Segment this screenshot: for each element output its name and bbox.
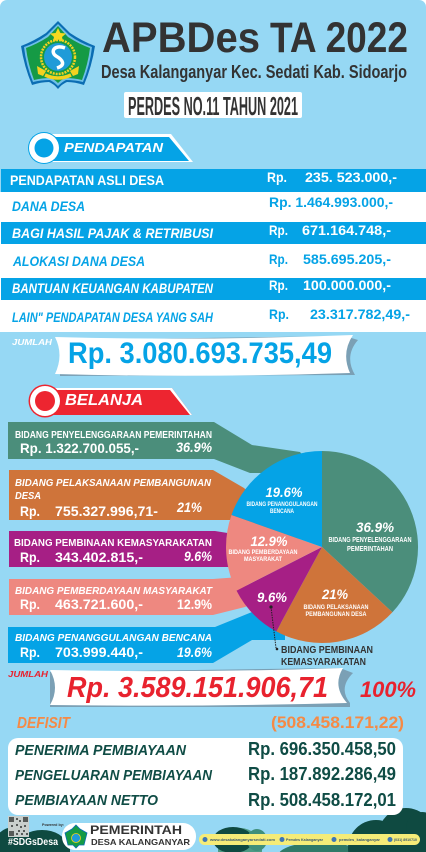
row: pengeluaran pembiayaan: Rp. 187.892.286,49 xyxy=(248,764,396,784)
footer hills xyxy=(0,808,426,852)
row: dana desa xyxy=(12,194,393,214)
row: pendapatan asli desa xyxy=(10,169,397,188)
footer logo pill: DESA KALANGANYAR xyxy=(91,837,190,847)
logo: Sidoarjo emblem xyxy=(21,21,95,89)
bar: pelaksanaan pembangunan: 755.327.996,71- xyxy=(55,503,158,519)
row: lain-lain: 23.317.782,49,- xyxy=(310,306,410,322)
bar: pelaksanaan pembangunan xyxy=(9,470,300,540)
callout: bidang pembinaan xyxy=(269,605,373,668)
pie chart xyxy=(226,451,418,643)
income total: Rp. 3.080.693.735,49 xyxy=(68,337,332,370)
bar: pelaksanaan pembangunan: Rp. xyxy=(20,503,40,519)
row: bantuan keuangan: 100.000.000,- xyxy=(303,277,391,293)
bar: pelaksanaan pembangunan: 21% xyxy=(176,499,202,515)
row: dana desa: DANA DESA xyxy=(12,198,85,214)
bar: pemberdayaan masyarakat: 12.9% xyxy=(177,596,212,612)
bar: pembinaan kemasyarakatan: BIDANG PEMBINAAN KEMASYARAKATAN xyxy=(14,538,212,549)
expense total xyxy=(8,668,416,707)
bar: penanggulangan bencana: 703.999.440,- xyxy=(55,644,143,660)
bar: pembinaan kemasyarakatan: 9.6% xyxy=(184,548,212,564)
footer logo pill xyxy=(62,823,196,850)
income total xyxy=(12,335,358,376)
bar: penanggulangan bencana xyxy=(8,612,285,663)
deficit row: DEFISIT xyxy=(17,715,71,732)
bar: pelaksanaan pembangunan: DESA xyxy=(15,490,41,502)
contact strip: Pemdes Kalanganyar xyxy=(286,837,323,842)
bar: pemberdayaan masyarakat: Rp. xyxy=(20,596,40,612)
heading: pendapatan xyxy=(28,132,193,164)
footer logo pill: PEMERINTAH xyxy=(90,825,182,837)
row: pengeluaran pembiayaan xyxy=(15,764,396,784)
bar: pembinaan kemasyarakatan xyxy=(9,531,240,567)
row: alokasi dana desa: Rp. xyxy=(269,251,288,267)
pie label: 36.9%: PEMERINTAHAN xyxy=(347,546,393,553)
row: penerima pembiayaan: Rp. 696.350.458,50 xyxy=(248,739,396,759)
pie label: 36.9% xyxy=(328,519,412,553)
pie label: 19.6%: BENCANA xyxy=(270,509,295,515)
row: penerima pembiayaan xyxy=(15,739,396,759)
row: lain-lain: Rp. xyxy=(269,306,289,322)
row: pendapatan asli desa: Rp. xyxy=(267,169,287,185)
deficit row: (508.458.171,22) xyxy=(271,713,404,732)
pie label: 12.9%: MASYARAKAT xyxy=(244,557,282,563)
pie label: 19.6% xyxy=(246,484,318,515)
title: TA 2022 xyxy=(270,14,408,62)
expense total: 100% xyxy=(360,677,416,702)
row: bagi hasil pajak: BAGI HASIL PAJAK & RETRIBUSI xyxy=(12,225,214,241)
expense total: Rp. 3.589.151.906,71 xyxy=(67,672,328,704)
pie label: 21%: 21% xyxy=(321,586,349,602)
heading: belanja: BELANJA xyxy=(65,392,143,409)
row: bagi hasil pajak: 671.164.748,- xyxy=(302,222,391,238)
row: bagi hasil pajak xyxy=(12,222,391,241)
pie label: 12.9%: 12.9% xyxy=(250,533,288,549)
contact strip: www.desakalanganyarsedati.com xyxy=(209,837,275,842)
pie label: 19.6%: 19.6% xyxy=(266,484,303,500)
expense total: JUMLAH xyxy=(8,670,48,679)
pie label: 12.9% xyxy=(228,533,298,563)
bar: penyelenggaraan pemerintahan: BIDANG PENYELENGGARAAN PEMERINTAHAN xyxy=(15,430,212,441)
heading: pendapatan: PENDAPATAN xyxy=(64,140,164,155)
bar: pembinaan kemasyarakatan: Rp. xyxy=(20,549,40,565)
row: bantuan keuangan xyxy=(12,277,391,296)
row: alokasi dana desa: ALOKASI DANA DESA xyxy=(12,253,145,269)
panel: financing xyxy=(8,738,403,815)
pie label: 21%: BIDANG PELAKSANAAN xyxy=(304,605,368,611)
row: dana desa: Rp. 1.464.993.000,- xyxy=(269,194,393,210)
bar: penyelenggaraan pemerintahan xyxy=(8,422,340,500)
panel: income table xyxy=(0,169,426,332)
contact strip: (031) 8910710 xyxy=(394,837,418,842)
title: APBDes xyxy=(102,14,260,62)
hashtag: #SDGsDesa xyxy=(8,837,58,848)
row: alokasi dana desa: 585.695.205,- xyxy=(303,251,391,267)
title xyxy=(102,14,408,62)
bar: pelaksanaan pembangunan: BIDANG PELAKSANAAN PEMBANGUNAN xyxy=(15,477,211,489)
contact strip: pemdes_kalanganyar xyxy=(339,837,380,842)
bar: pemberdayaan masyarakat: BIDANG PEMBERDAYAAN MASYARAKAT xyxy=(15,586,213,597)
bar: penanggulangan bencana: Rp. xyxy=(20,644,40,660)
row: lain-lain: LAIN" PENDAPATAN DESA YANG SAH xyxy=(12,309,214,325)
callout: bidang pembinaan: BIDANG PEMBINAAN xyxy=(281,644,373,656)
bar: penyelenggaraan pemerintahan: 36.9% xyxy=(176,439,212,455)
row: pembiayaan netto xyxy=(15,790,396,810)
row: bagi hasil pajak: Rp. xyxy=(269,222,288,238)
pie label: 9.6%: 9.6% xyxy=(257,589,288,605)
row: bantuan keuangan: BANTUAN KEUANGAN KABUPATEN xyxy=(12,280,214,296)
deficit row xyxy=(17,713,404,732)
row: pendapatan asli desa: 235. 523.000,- xyxy=(305,169,397,185)
bar: penanggulangan bencana: BIDANG PENANGGULANGAN BENCANA xyxy=(15,633,212,644)
bar: penyelenggaraan pemerintahan: Rp. 1.322.700.055,- xyxy=(20,440,139,456)
row: pendapatan asli desa: PENDAPATAN ASLI DESA xyxy=(10,172,164,188)
QR code xyxy=(8,816,29,837)
row: pengeluaran pembiayaan: PENGELUARAN PEMBIAYAAN xyxy=(15,768,212,784)
row: penerima pembiayaan: PENERIMA PEMBIAYAAN xyxy=(15,743,187,759)
bar: penanggulangan bencana: 19.6% xyxy=(177,644,212,660)
powered by: Powered by: xyxy=(42,823,64,827)
row: lain-lain xyxy=(12,306,410,325)
pie label: 19.6%: BIDANG PENANGGULANGAN xyxy=(246,502,318,508)
row: pembiayaan netto: Rp. 508.458.172,01 xyxy=(248,790,396,810)
row: pembiayaan netto: PEMBIAYAAN NETTO xyxy=(15,793,159,809)
pie label: 12.9%: BIDANG PEMBERDAYAAN xyxy=(228,550,298,556)
row: alokasi dana desa xyxy=(12,251,391,269)
bar: pembinaan kemasyarakatan: 343.402.815,- xyxy=(55,549,143,565)
pie label: 21% xyxy=(304,586,368,618)
pie label: 21%: PEMBANGUNAN DESA xyxy=(306,612,367,618)
bar: pemberdayaan masyarakat: 463.721.600,- xyxy=(55,596,143,612)
income total: JUMLAH xyxy=(12,338,52,347)
bar: pemberdayaan masyarakat xyxy=(9,577,260,615)
callout: bidang pembinaan: KEMASYARAKATAN xyxy=(281,656,366,668)
heading: belanja xyxy=(28,384,192,418)
contact strip xyxy=(199,834,420,845)
row: bantuan keuangan: Rp. xyxy=(269,277,288,293)
pie label: 36.9%: 36.9% xyxy=(356,519,395,535)
regulation label xyxy=(124,91,302,121)
